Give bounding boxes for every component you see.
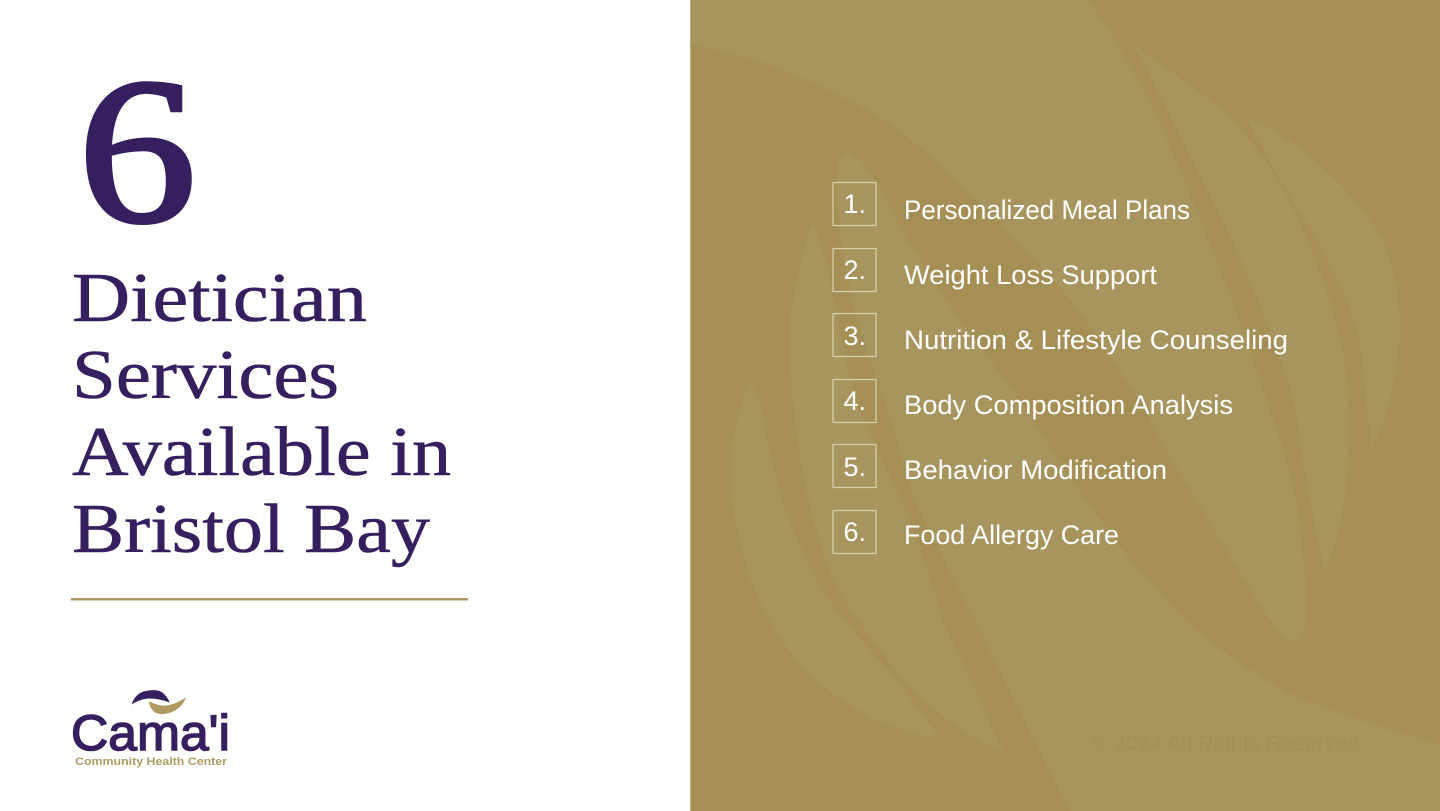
logo: Cama'i Community Health Center bbox=[71, 690, 230, 768]
logo wordmark: Cama'i bbox=[71, 705, 230, 761]
item 6: 6. bbox=[843, 517, 866, 547]
item 3: 3. bbox=[843, 321, 866, 351]
title underline bbox=[71, 598, 468, 600]
item 3: Nutrition & Lifestyle Counseling bbox=[904, 325, 1288, 355]
item 1: Personalized Meal Plans bbox=[904, 195, 1190, 225]
item 6: Food Allergy Care bbox=[904, 520, 1119, 550]
icon: logo gold hand bbox=[149, 698, 186, 714]
item 1: 1. bbox=[843, 189, 866, 219]
copyright: © 2024 All Rights Reserved bbox=[1091, 732, 1360, 755]
panel: left white bbox=[0, 0, 690, 811]
title: Available in bbox=[72, 414, 451, 491]
title: Dietician bbox=[72, 260, 367, 337]
logo tagline: Community Health Center bbox=[75, 756, 228, 768]
item 1 bbox=[833, 182, 1190, 226]
item 4 bbox=[833, 380, 1233, 422]
item 5: 5. bbox=[843, 452, 866, 482]
item 2: Weight Loss Support bbox=[904, 260, 1158, 290]
list of services bbox=[833, 182, 1288, 554]
item 2: 2. bbox=[843, 255, 866, 285]
item 4: Body Composition Analysis bbox=[904, 390, 1233, 420]
item 5: Behavior Modification bbox=[904, 455, 1167, 485]
panel: right gold with leaf watermark bbox=[690, 0, 1440, 811]
title: Services bbox=[72, 337, 339, 414]
big number 6: 6 bbox=[78, 36, 197, 267]
title: Bristol Bay bbox=[72, 491, 430, 568]
icon: logo purple wing bbox=[132, 690, 170, 704]
item 4: 4. bbox=[843, 386, 866, 416]
item 6 bbox=[833, 510, 1119, 554]
item 2 bbox=[833, 248, 1158, 292]
title bbox=[72, 260, 451, 568]
item 3 bbox=[833, 314, 1288, 356]
item 5 bbox=[833, 444, 1167, 488]
